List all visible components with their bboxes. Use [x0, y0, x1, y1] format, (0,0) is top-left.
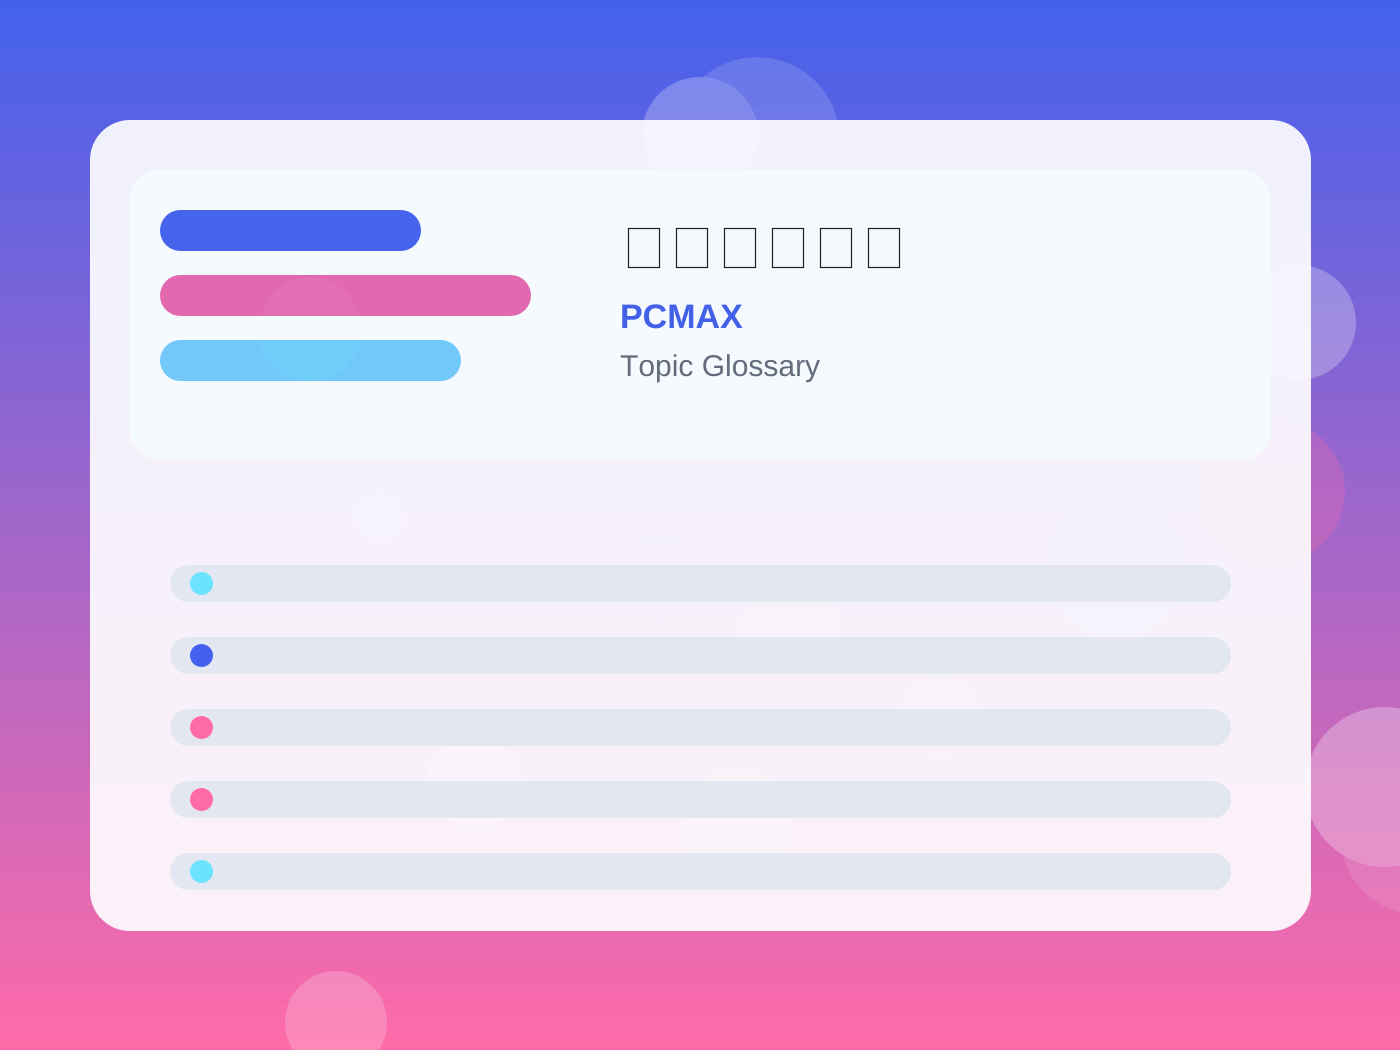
- list row 1: [170, 565, 1231, 602]
- subtitle: Topic Glossary: [620, 350, 820, 383]
- decorative bar: pink: [160, 275, 531, 316]
- background circles: [285, 57, 1400, 1050]
- panel: main card: [90, 120, 1311, 931]
- list row 5: [170, 853, 1231, 890]
- list row 3: [170, 709, 1231, 746]
- decorative bar: blue: [160, 210, 421, 251]
- title: missing-glyph boxes: [628, 228, 900, 268]
- list row 4: [170, 781, 1231, 818]
- heading: PCMAX: PCMAX: [620, 298, 743, 336]
- panel: header: [130, 170, 1271, 460]
- decorative bar: light blue: [160, 340, 461, 381]
- list row 2: [170, 637, 1231, 674]
